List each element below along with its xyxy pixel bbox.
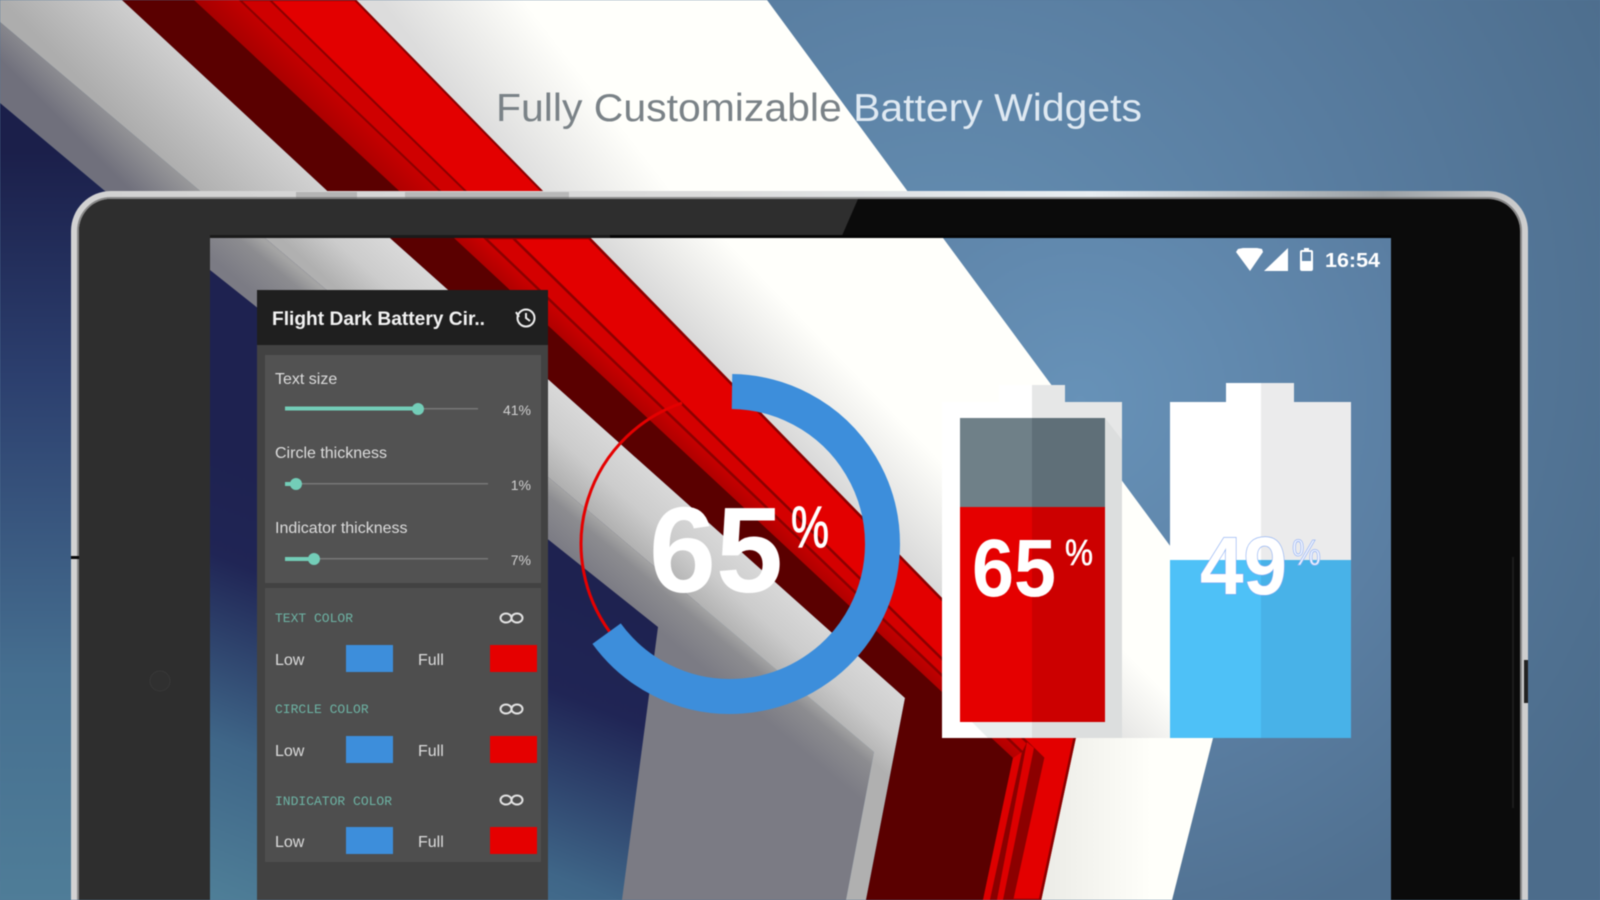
indicator color row: INDICATOR COLOR [275, 794, 392, 809]
slider: circle thickness [275, 445, 531, 493]
panel: widget settings [257, 290, 548, 900]
charge level [1170, 560, 1351, 738]
indicator color row: Full [418, 834, 444, 851]
circle color row: Low [275, 743, 305, 760]
panel header: Flight Dark Battery Cir.. [272, 309, 485, 330]
text color row [275, 611, 537, 672]
slider: indicator thickness: Indicator thickness [275, 520, 408, 537]
slider: text size: 41% [503, 402, 531, 418]
thin red track [581, 403, 682, 632]
circle battery widget [581, 392, 882, 696]
circle color row [275, 702, 537, 763]
card: sliders [265, 355, 541, 583]
status bar [1236, 248, 1381, 272]
tablet screen wallpaper [210, 238, 1391, 900]
slider: text size [275, 371, 531, 418]
tablet bezel [79, 199, 1520, 900]
blue battery widget [1170, 383, 1351, 738]
empty level [960, 418, 1105, 507]
slider: circle thickness: 1% [511, 477, 531, 493]
blue progress arc [607, 392, 882, 696]
slider: indicator thickness: 7% [511, 552, 531, 568]
side button [1524, 660, 1528, 703]
clock: 16:54 [1325, 250, 1381, 272]
text color row: TEXT COLOR [275, 611, 353, 626]
battery value: 65 [972, 523, 1056, 614]
tablet device [71, 191, 1528, 900]
circle value: 65 [649, 482, 783, 618]
frame inner shade [78, 198, 1521, 900]
circle percent sign: % [791, 495, 829, 560]
slider: circle thickness: Circle thickness [275, 445, 387, 462]
text color row: Low [275, 652, 305, 669]
indicator color row: Low [275, 834, 305, 851]
card: colors [265, 588, 541, 862]
indicator color row [275, 794, 537, 854]
tablet silver frame [71, 191, 1528, 900]
title: Fully Customizable Battery Widgets [496, 87, 1142, 130]
circle color row: Full [418, 743, 444, 760]
slider: indicator thickness [275, 520, 531, 568]
icon: battery [1301, 248, 1312, 270]
icon: wifi [1236, 248, 1263, 271]
battery shell [1170, 383, 1351, 560]
battery shell [942, 385, 1122, 738]
icon: restore [516, 310, 534, 326]
icon: signal [1264, 248, 1288, 271]
charge level [960, 507, 1105, 722]
red battery widget [942, 385, 1122, 738]
panel header [257, 290, 548, 345]
side notch [71, 556, 79, 559]
text color row: Full [418, 652, 444, 669]
battery percent sign: % [1292, 532, 1321, 573]
slider: text size: Text size [275, 371, 337, 388]
frame highlight segments [296, 192, 569, 199]
circle color row: CIRCLE COLOR [275, 702, 369, 717]
camera [150, 671, 170, 691]
battery percent sign: % [1065, 532, 1093, 573]
battery value: 49 [1200, 521, 1287, 612]
